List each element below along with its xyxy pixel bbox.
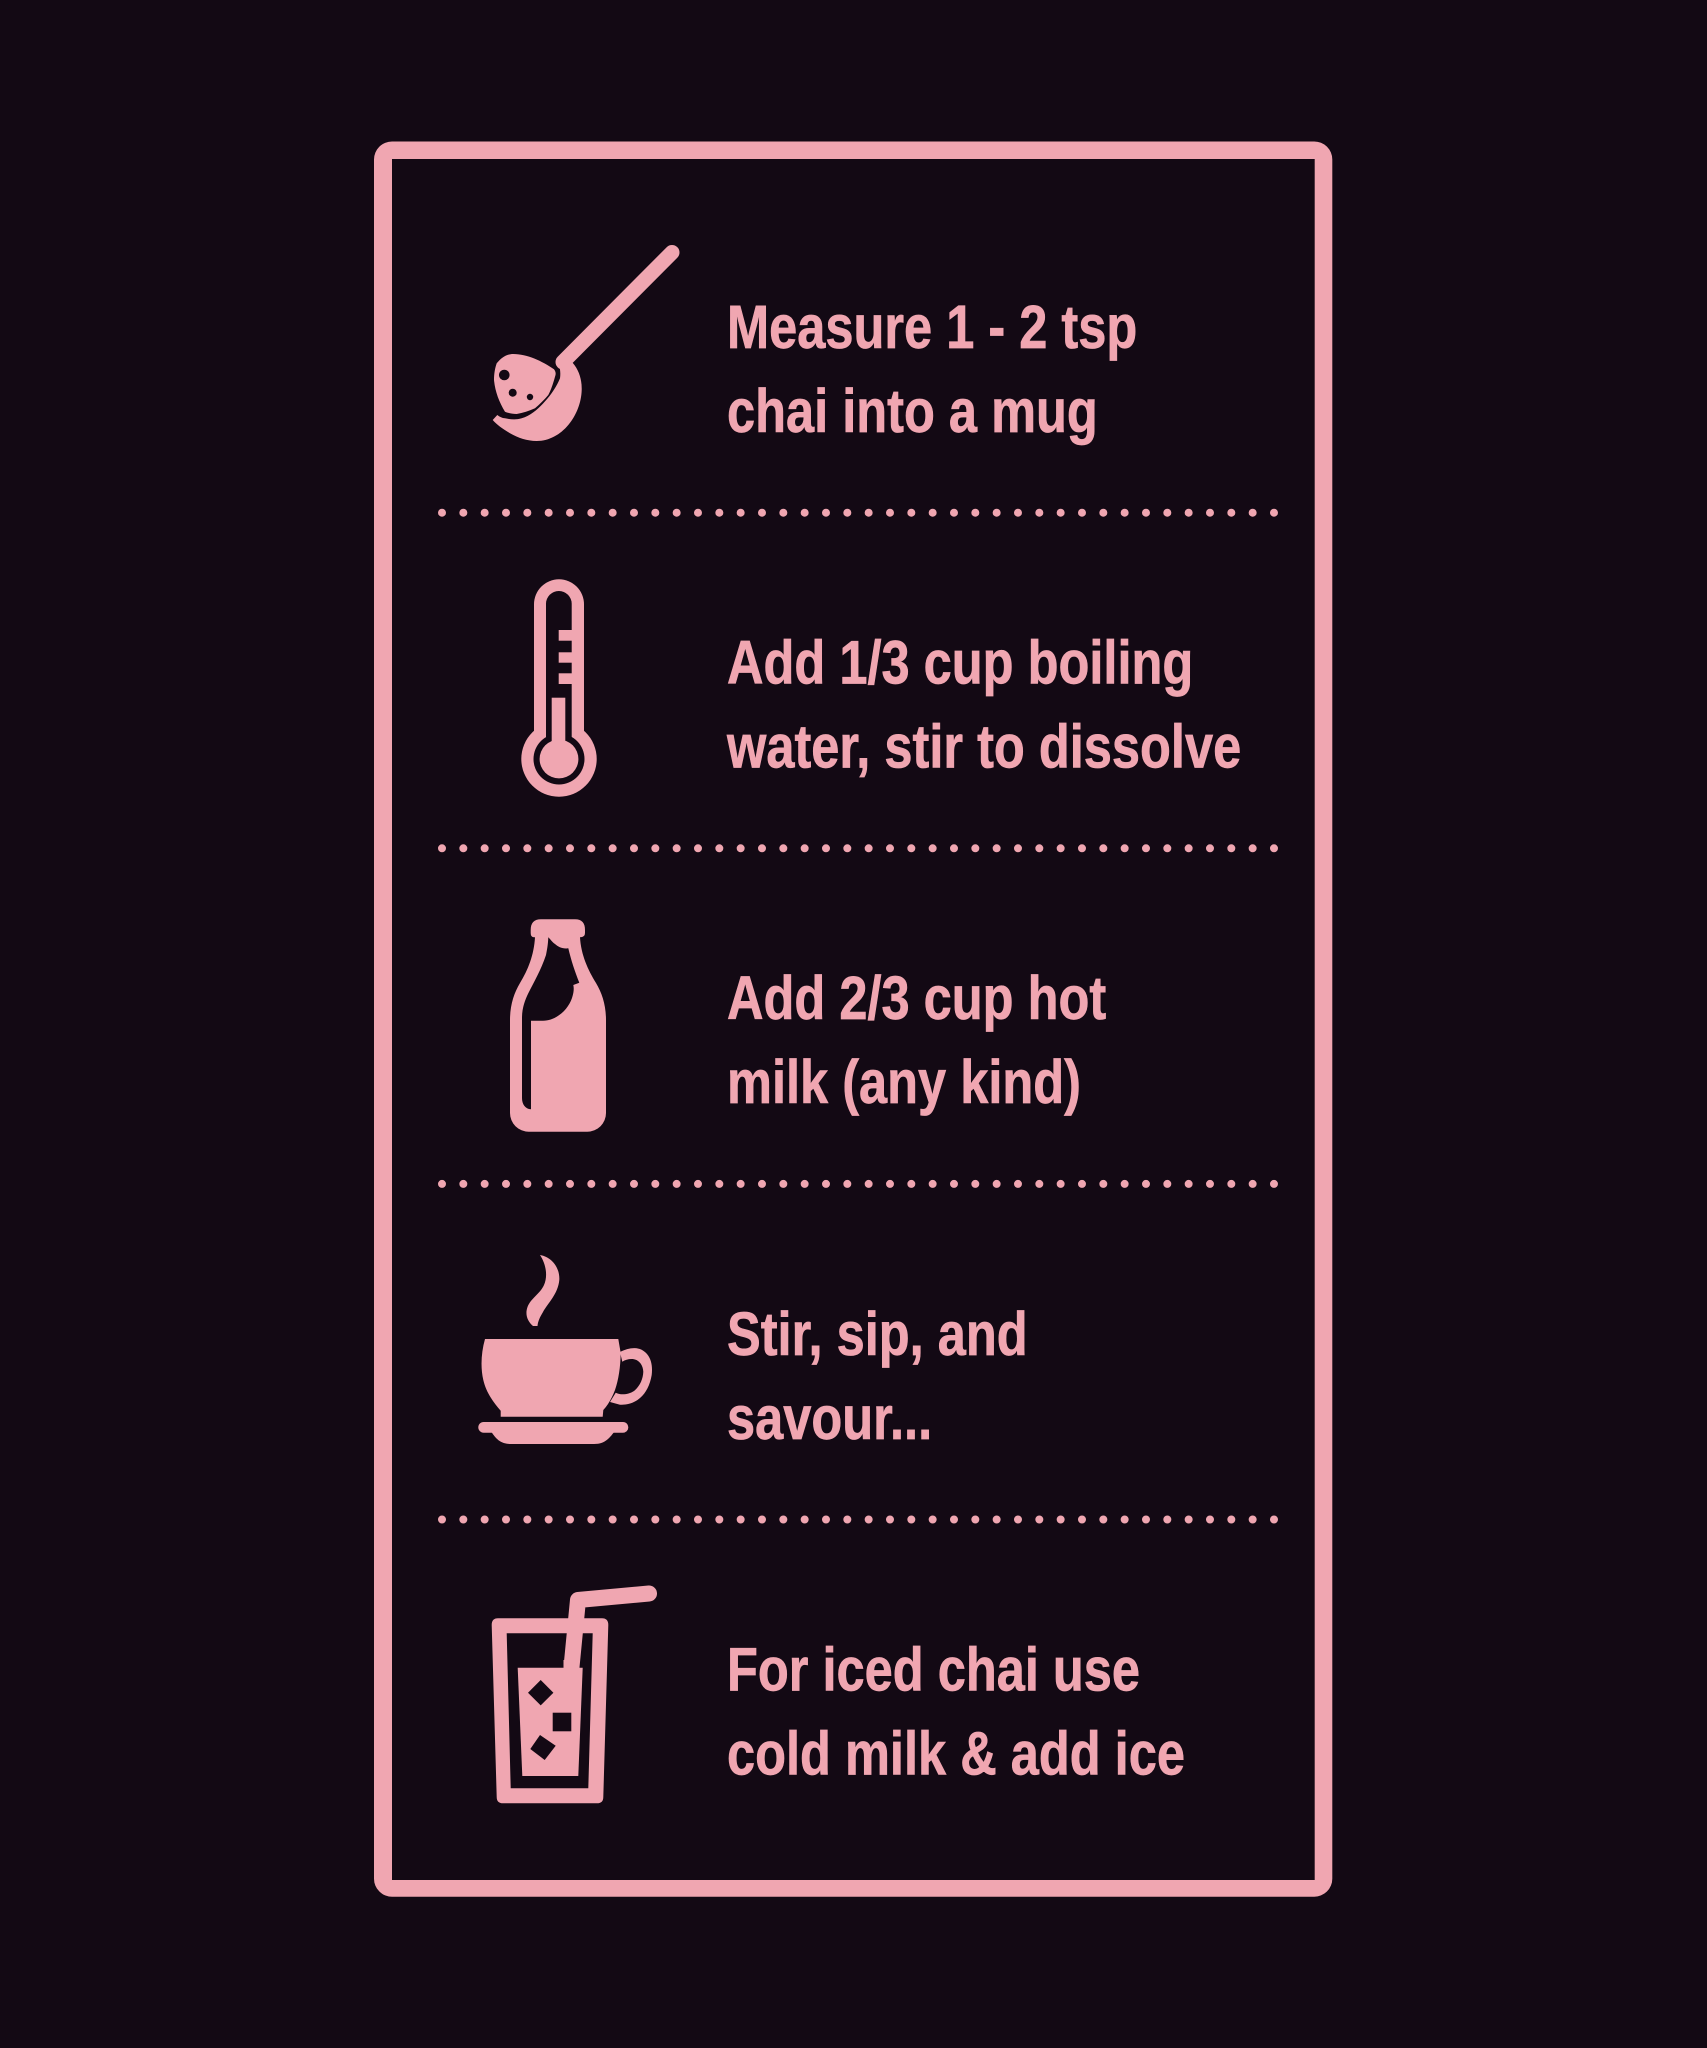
text: step 3 [727,964,1106,1116]
text: step 1: chai into a mug [727,376,1098,445]
icon: iced drink with straw [492,1594,649,1803]
text: step 3: milk (any kind) [727,1048,1081,1116]
text: step 4: Stir, sip, and [727,1299,1028,1368]
text: step 2: Add 1/3 cup boiling [727,628,1193,697]
text: step 2: water, stir to dissolve [726,712,1241,781]
icon: milk bottle [510,919,606,1132]
text: step 1: Measure 1 - 2 tsp [727,292,1137,361]
panel: instruction frame [374,141,1332,1897]
text: step 5: For iced chai use [727,1635,1140,1703]
text: step 4 [727,1299,1028,1452]
text: step 2 [726,628,1241,781]
icon: spoon with chai powder [493,252,672,441]
icon: steaming cup on saucer [478,1255,652,1444]
text: step 4: savour... [727,1383,932,1452]
icon: thermometer [521,579,597,797]
text: step 3: Add 2/3 cup hot [727,964,1106,1032]
text: step 5: cold milk & add ice [727,1719,1185,1787]
text: step 5 [727,1635,1185,1787]
text: step 1 [727,292,1137,445]
